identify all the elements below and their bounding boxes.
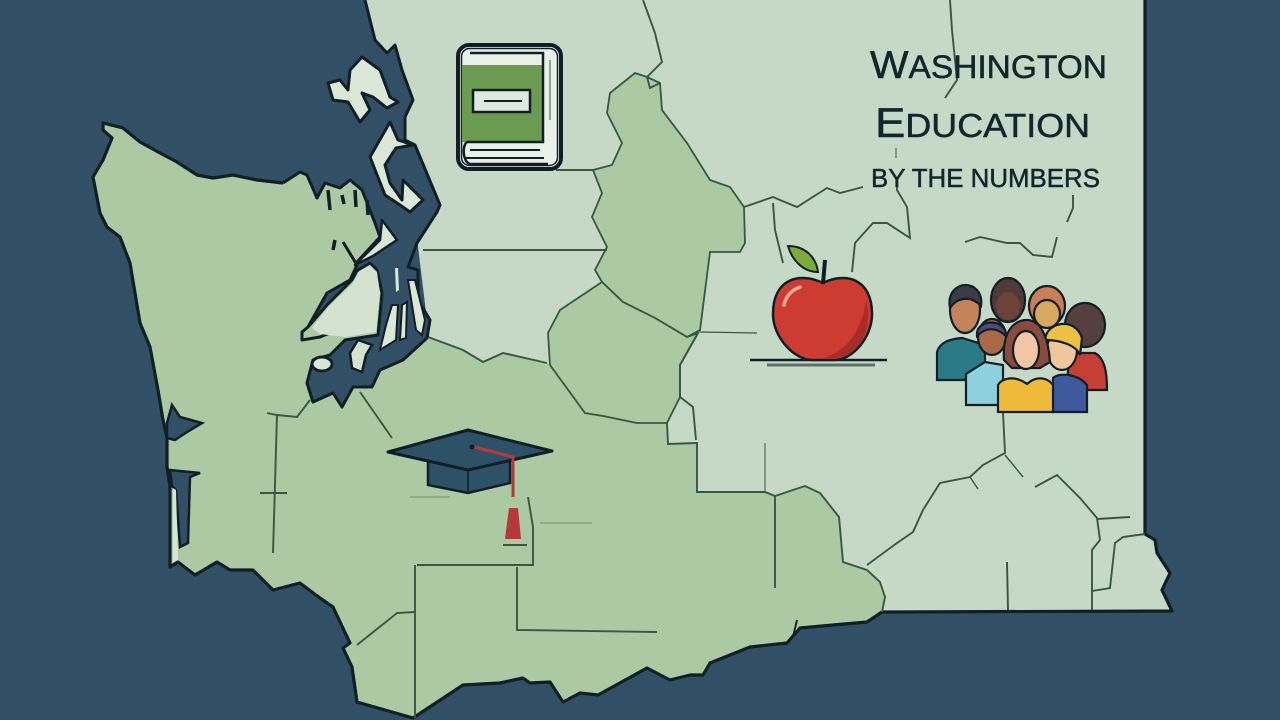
person back right	[1066, 353, 1107, 390]
region: green central county, south	[548, 282, 698, 423]
county lines	[260, 0, 1145, 718]
island: south sound loop	[350, 340, 372, 372]
apple body	[773, 278, 872, 360]
sound shoreline	[283, 0, 440, 407]
person left	[937, 338, 985, 380]
cap base	[428, 458, 510, 493]
apple shadow line	[750, 359, 887, 361]
icon: apple	[750, 246, 887, 365]
person seated left	[966, 362, 1003, 405]
person blue shirt	[1053, 375, 1087, 412]
tassel	[505, 508, 521, 539]
icon: book	[458, 45, 561, 169]
person yellow shirt	[1004, 320, 1050, 368]
icon: group of people	[937, 278, 1107, 412]
title	[870, 44, 1107, 193]
title line: Washington: WASHINGTON	[870, 44, 1107, 87]
island: Bainbridge	[355, 220, 397, 265]
person back middle	[991, 278, 1025, 322]
region: light northern and eastern land	[365, 0, 1172, 612]
region: green western and southern land	[93, 123, 885, 718]
tassel cord	[474, 447, 513, 497]
island: Anderson	[312, 357, 332, 371]
peninsula: Kitsap	[312, 265, 380, 337]
apple leaf	[788, 246, 818, 272]
island: San Juan group	[328, 57, 398, 122]
title line: Education: EDUCATION	[875, 99, 1090, 146]
icon: graduation cap	[388, 430, 552, 539]
island: Whidbey	[370, 122, 423, 212]
island strips in main channel	[380, 305, 398, 350]
Puget Sound water	[283, 0, 440, 407]
subtitle line: by the numbers: BY THE NUMBERS	[871, 163, 1100, 193]
person back centre-right	[1029, 286, 1065, 326]
bay: Grays Harbor	[170, 470, 200, 547]
cap board	[388, 430, 552, 470]
shore inlets	[328, 190, 368, 250]
bay: Willapa north	[167, 405, 202, 440]
region: green central county, north	[592, 73, 745, 337]
spit	[173, 488, 178, 562]
apple stem	[823, 260, 825, 284]
